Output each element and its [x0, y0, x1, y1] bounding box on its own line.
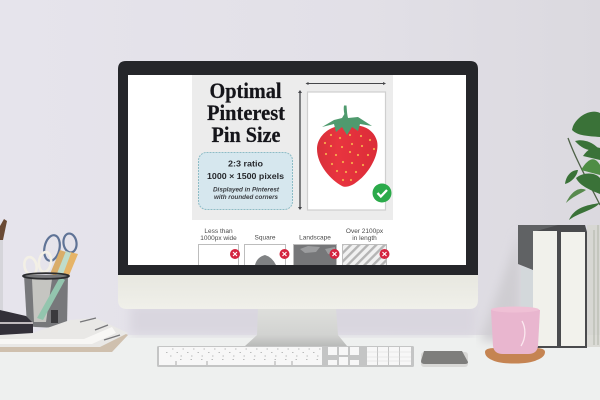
- pencils in cup: [50, 250, 78, 278]
- pencils in jar: [0, 219, 7, 240]
- keyboard base: [157, 346, 414, 367]
- example: less than 1000px wide: 1000px wide: [200, 235, 237, 242]
- infographic panel: [192, 75, 393, 220]
- monitor chin: [118, 270, 478, 309]
- icon: strawberry: [317, 106, 378, 187]
- notebook pages: [0, 322, 33, 324]
- plant: [565, 112, 600, 347]
- example: over 2100px in length: in length: [352, 235, 377, 242]
- glass jar: [0, 240, 3, 310]
- plant vase: [587, 225, 600, 347]
- icon: green check badge: [372, 184, 392, 202]
- ratio info box: 2:3 ratio: [228, 158, 263, 168]
- size examples row: [198, 228, 390, 266]
- example: landscape: Landscape: [299, 234, 331, 242]
- example: over 2100px in length: Over 2100px: [346, 228, 384, 235]
- keyboard: [157, 346, 414, 367]
- strawberry seeds: [324, 134, 375, 181]
- pink mug on saucer: [485, 306, 545, 364]
- mug handle: [521, 321, 525, 346]
- plant leaves: [565, 112, 600, 220]
- right pages: [561, 232, 585, 346]
- wall shadow behind monitor: [130, 305, 475, 335]
- monitor screen: [128, 75, 466, 265]
- ratio info box: 1000 × 1500 pixels: [207, 171, 284, 181]
- title: Pin Size: [212, 122, 281, 147]
- monitor stand: [245, 308, 347, 346]
- strawberry stem: [344, 106, 349, 121]
- strawberry leaves: [322, 113, 372, 135]
- strawberry body: [317, 125, 378, 187]
- book shadow: [480, 232, 520, 345]
- panel background: [192, 75, 393, 220]
- ratio info box: [198, 152, 292, 210]
- smartphone on desk: [421, 351, 468, 367]
- books: [480, 225, 587, 348]
- desk surface: [0, 335, 600, 400]
- dark book top: [518, 225, 558, 270]
- white scissors handles: [23, 251, 52, 276]
- example: square: Square: [255, 234, 276, 242]
- paper stack: [0, 318, 128, 352]
- desk clutter: left side: [0, 219, 128, 352]
- title: [207, 78, 286, 147]
- left pages: [533, 231, 557, 346]
- example: square: [244, 234, 290, 266]
- screen lower bezel overlap: [128, 265, 466, 275]
- monitor bezel: [118, 61, 478, 275]
- numeric keys: [367, 347, 411, 365]
- title: Pinterest: [207, 100, 286, 125]
- example: less than 1000px wide: [198, 228, 240, 266]
- example: landscape: [294, 234, 340, 266]
- book covers: [532, 225, 587, 348]
- lower gap: [521, 266, 533, 345]
- pin card: [308, 92, 386, 210]
- main keys: [159, 347, 322, 365]
- blue scissors handles: [42, 233, 78, 262]
- arrow: height: [298, 90, 302, 210]
- navigation keys: [328, 347, 359, 365]
- notebook: [0, 310, 33, 335]
- ratio info box: Displayed in Pinterest: [213, 186, 280, 194]
- plant stems: [568, 138, 600, 345]
- mesh pencil cup: [23, 273, 69, 328]
- example: less than 1000px wide: Less than: [204, 228, 233, 235]
- mug: [491, 308, 540, 354]
- title: Optimal: [210, 78, 282, 103]
- ratio info box: with rounded corners: [214, 194, 279, 201]
- arrow: width: [306, 82, 386, 85]
- example: over 2100px in length: [342, 228, 390, 266]
- saucer: [485, 348, 545, 364]
- monitor: [118, 61, 478, 309]
